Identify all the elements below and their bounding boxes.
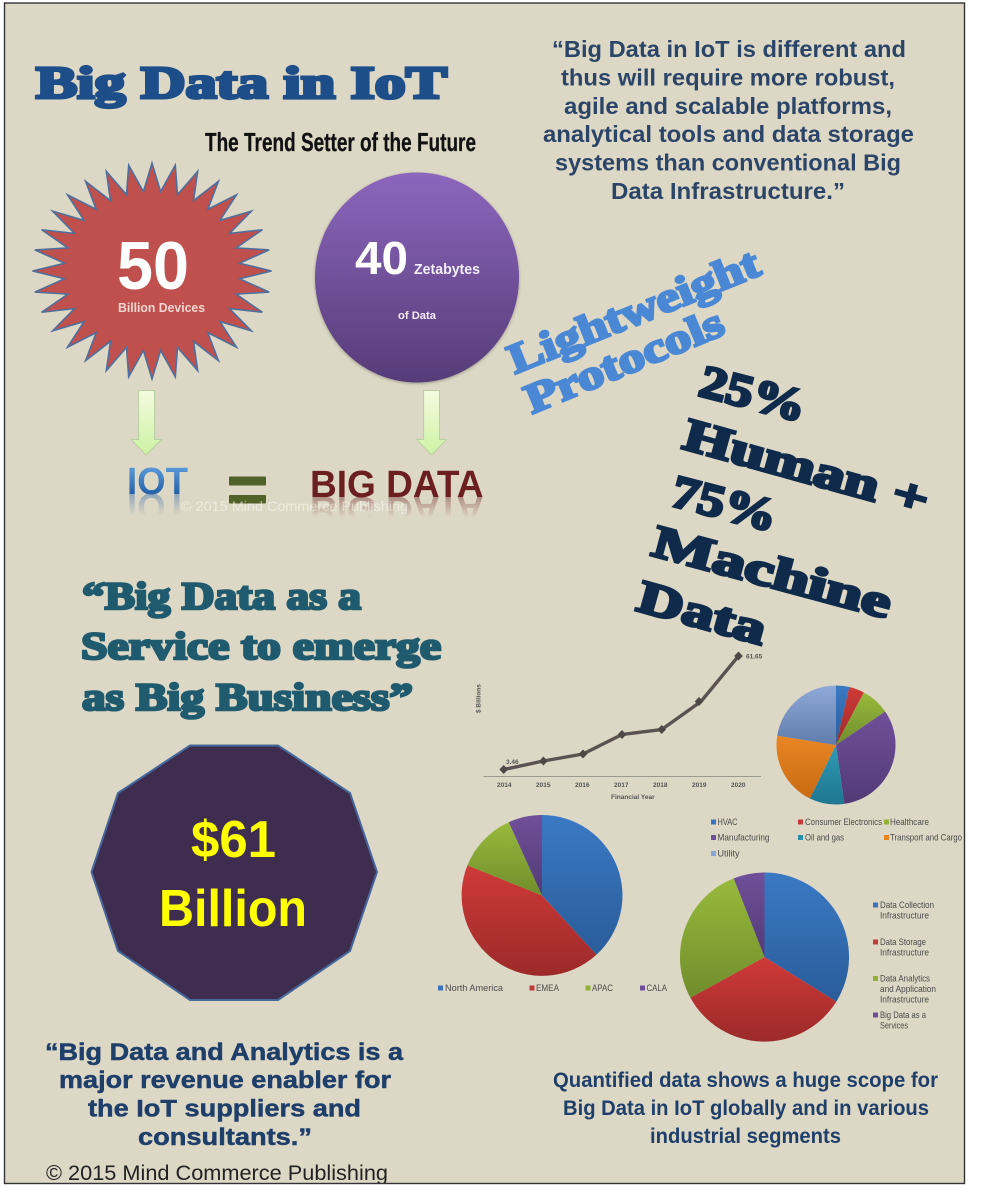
- rotated label: 25% human + 75% machine data: Human +: [678, 408, 935, 525]
- legend: industry segments: Utility: [718, 848, 740, 860]
- rotated label: lightweight protocols: Protocols: [518, 300, 731, 423]
- legend: infrastructure segments: Infrastructure: [880, 948, 929, 958]
- equation: IOT: IOT: [127, 485, 188, 527]
- quote: big data in iot is different: “Big Data in IoT is different and: [552, 36, 906, 62]
- pie chart: industry segments: [776, 685, 896, 804]
- line chart: revenue by financial year: 2015: [536, 782, 551, 789]
- starburst: 50 billion devices: 50: [117, 228, 189, 304]
- polygon: $61 billion: $61: [191, 811, 276, 869]
- quote: big data as a service: as Big Business”: [82, 676, 413, 719]
- legend: infrastructure segments: Data Storage: [880, 937, 926, 948]
- legend: industry segments: Transport and Cargo: [890, 832, 962, 844]
- legend: regions: [438, 983, 668, 994]
- circle: 40 zetabytes of data: of Data: [398, 310, 437, 322]
- legend: infrastructure segments: Services: [880, 1020, 908, 1032]
- equation: big data: [310, 464, 484, 530]
- equation: big data: BIG DATA: [310, 488, 484, 530]
- line chart: revenue by financial year: 2017: [614, 782, 629, 789]
- legend: industry segments: [711, 817, 962, 860]
- circle: 40 zetabytes of data: 40: [355, 232, 408, 284]
- quote: revenue enabler: major revenue enabler for: [59, 1067, 391, 1094]
- legend: industry segments: Manufacturing: [718, 832, 770, 844]
- equals sign: [229, 476, 266, 504]
- quote: revenue enabler: consultants.”: [138, 1124, 312, 1151]
- quote: revenue enabler: “Big Data and Analytics is a: [45, 1039, 404, 1066]
- legend: regions: CALA: [646, 983, 668, 994]
- quote: big data in iot is different: [543, 36, 914, 204]
- legend: infrastructure segments: Infrastructure: [880, 910, 929, 922]
- line chart: revenue by financial year: 3.46: [506, 759, 519, 766]
- copyright: © 2015 Mind Commerce Publishing: [46, 1162, 388, 1185]
- legend: regions: EMEA: [536, 983, 560, 994]
- subtitle: The Trend Setter of the Future: [205, 127, 476, 157]
- line chart: revenue by financial year: 61.65: [746, 654, 763, 660]
- rotated label: 25% human + 75% machine data: 75%: [666, 465, 783, 541]
- circle: 40 zetabytes of data: Zetabytes: [414, 262, 480, 278]
- arrow: circle to big data: [416, 390, 446, 455]
- pie chart: infrastructure segments: [680, 872, 849, 1042]
- rotated label: 25% human + 75% machine data: 25%: [694, 355, 812, 432]
- rotated label: 25% human + 75% machine data: Machine: [647, 515, 897, 628]
- line chart: revenue by financial year: $ Billions: [476, 684, 482, 713]
- title: Big Data in IoT: [36, 57, 447, 108]
- circle: 40 zetabytes of data: [315, 172, 519, 382]
- quote: big data in iot is different: agile and scalable platforms,: [564, 93, 892, 119]
- line chart: revenue by financial year: [476, 652, 763, 801]
- legend: industry segments: HVAC: [718, 817, 738, 828]
- quote: big data in iot is different: systems than conventional Big: [555, 150, 901, 176]
- polygon: $61 billion: Billion: [159, 880, 307, 938]
- arrow: star to IOT: [131, 390, 162, 455]
- starburst: 50 billion devices: [32, 163, 272, 379]
- legend: infrastructure segments: [873, 900, 936, 1032]
- line chart: revenue by financial year: 2019: [692, 782, 707, 789]
- equation: big data: BIG DATA: [310, 464, 484, 506]
- quote: revenue enabler: the IoT suppliers and: [88, 1096, 361, 1122]
- legend: regions: North America: [445, 983, 504, 994]
- quote: quantified data: industrial segments: [650, 1125, 841, 1148]
- quote: revenue enabler: [45, 1039, 404, 1151]
- quote: big data as a service: “Big Data as a: [82, 575, 361, 618]
- legend: infrastructure segments: Data Collection: [880, 900, 934, 911]
- starburst: 50 billion devices: Billion Devices: [118, 300, 205, 315]
- line chart: revenue by financial year: 2018: [653, 782, 668, 789]
- equation: IOT: [127, 461, 188, 527]
- equation: IOT: IOT: [127, 461, 188, 503]
- rotated label: lightweight protocols: [502, 241, 766, 423]
- legend: infrastructure segments: Data Analytics: [880, 974, 930, 984]
- legend: industry segments: Healthcare: [890, 817, 929, 828]
- legend: infrastructure segments: and Application: [880, 984, 936, 995]
- legend: industry segments: Oil and gas: [805, 832, 844, 844]
- legend: infrastructure segments: Infrastructure: [880, 994, 929, 1006]
- legend: infrastructure segments: Big Data as a: [880, 1010, 927, 1021]
- polygon: $61 billion: [92, 746, 377, 1000]
- quote: quantified data: Quantified data shows a huge scope for: [553, 1069, 938, 1092]
- line chart: revenue by financial year: 2020: [731, 782, 746, 789]
- quote: big data as a service: [81, 575, 441, 719]
- watermark: © 2015 Mind Commerce Publishing: [181, 498, 408, 514]
- legend: regions: APAC: [592, 983, 613, 994]
- rotated label: 25% human + 75% machine data: [632, 355, 935, 655]
- legend: industry segments: Consumer Electronics: [805, 817, 882, 828]
- pie chart: regions: [462, 815, 622, 976]
- rotated label: lightweight protocols: Lightweight: [502, 241, 766, 383]
- quote: big data as a service: Service to emerge: [81, 625, 441, 668]
- line chart: revenue by financial year: 2014: [497, 782, 512, 789]
- rotated label: 25% human + 75% machine data: Data: [632, 570, 772, 655]
- line chart: revenue by financial year: Financial Year: [611, 794, 655, 801]
- quote: quantified data: Big Data in IoT globally and in various: [563, 1097, 929, 1120]
- quote: big data in iot is different: analytical tools and data storage: [543, 121, 914, 147]
- quote: big data in iot is different: thus will require more robust,: [561, 64, 895, 90]
- quote: quantified data: [553, 1069, 938, 1148]
- line chart: revenue by financial year: 2016: [575, 782, 590, 789]
- quote: big data in iot is different: Data Infrastructure.”: [611, 178, 845, 204]
